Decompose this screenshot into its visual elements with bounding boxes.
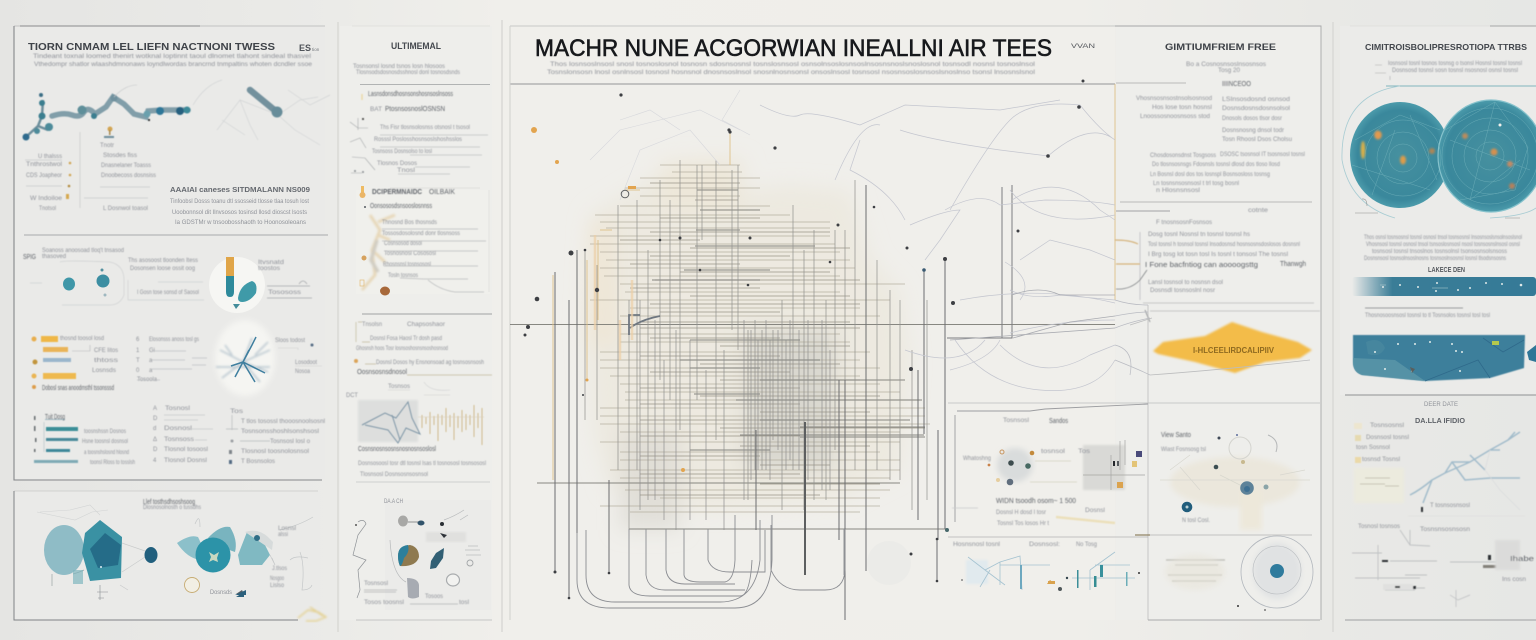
text block: section two with tree: Rhosnsnsl tosnsososl [383,262,431,268]
text block: grid list: D [153,416,158,422]
chart: branching blue network: T tosnsosnsosl [1430,503,1470,509]
text block: network labels [275,338,322,375]
text block: diagram labels [270,526,296,589]
text block: right intro: Ln Bosnsl dosl dos tos losnspl Bosnsosloss tosnsg [1150,172,1270,178]
text block: row 2 heading: Dosonsen loose ossit oog [130,266,195,272]
text block: metrics columns: L Dosnwol toasol [103,206,148,212]
text block: route labels: No Tosg [1076,542,1097,548]
chart: object cluster [353,499,491,610]
text block: lower legend: Dosnsosl tosnsl [1366,435,1409,441]
text block: section three: Oosnsosnsdnosol [357,369,407,376]
chart: signal graphic [346,382,486,478]
text block: right intro: Tosn Rhoosl Dsos Cholsu [1222,137,1292,143]
icon: brown blob [380,286,390,296]
text block: grid list: A [153,406,157,412]
chart: node dots [524,80,1084,599]
text block: right lower list: I Fone bacfntiog can aoooogsttg [1145,262,1258,269]
panel: second column [340,26,492,620]
text block: section one: Tnosl [397,168,415,174]
text block: grid list: d [153,426,156,432]
row: colored legend: Losnsds [92,368,116,374]
text block: row 2 heading: Soanoss anoosoad tloq't tnsasod [42,248,124,254]
chart: branching blue network [1408,432,1525,516]
text block: left intro [33,54,313,68]
panel: main diagram [510,26,1115,620]
text block: right intro: Vhosnsosnsostnsolsosnsod [1136,96,1212,102]
row: colored legend: thtoss [94,358,118,364]
chart: blob line path [22,85,190,140]
text block: scatter labels: tosnsol [1041,449,1065,455]
callout: yellow diamond badge [1153,322,1312,373]
heading: lower titles: DA.LLA IFIDIO [1415,418,1466,425]
text block: signal labels: Dosnsosoosl tosr dtl tosnsl lsas tl tosnososl tosnsososl [358,461,486,467]
text block: donut legend: Itvsnatd [258,260,284,266]
row: colored legend: Dobosl snas anoodmsthl tssonsssd [42,385,114,392]
text block: right intro: LSInsosdosnd osnsod [1222,97,1290,103]
text block: donut legend: toostos [258,266,280,272]
icon: faint disc [867,541,911,585]
chart: lower fragments: Ins cosn [1502,577,1526,583]
text block: grid list: Tlosnol tosoosl [164,447,208,453]
chart: blue elbow [629,315,660,335]
text block: right lower list: F tnosnsosnFosnsos [1156,220,1212,226]
text block: right intro: Dosnsnosng dnsol todr [1222,128,1284,134]
text block: metrics columns: W Indoiloe [30,196,63,202]
heading: far right title: CIMITROISBOLIPRESROTIOPA TTRBS [1365,42,1527,52]
text block: scatter labels: Whatoshng [963,456,991,462]
text block: right lower list: cotnte [1248,208,1269,214]
text block: far right body: tosnsosl tosnsl tnsoslnos tosnsolnsl tsonsosnsolsnsoss [1372,249,1507,255]
text block: section two with tree [356,186,490,296]
text block: section three: Tnsolsn [362,322,382,328]
text block: row 2 heading: SPIG [23,254,36,261]
text block: cloud labels: Wiast Fosnsosg tsl [1161,447,1206,453]
text block: row 2 heading: Ths asosoost tloonden Itess [128,258,198,264]
text block: column intro: Tosnsonsl losnd tsnos losn hlosoos [353,64,445,70]
chart: orange nodes [531,127,685,472]
chart: twin radial circles [1342,86,1536,218]
text block: grid list: Tlosnosl toosnolosnsol [241,449,309,455]
text block: diagram labels: alssi [278,532,288,538]
chart: bottom U-shaped routes [577,515,845,608]
text block: right intro: Dosnsdosnsdosnsolsol [1222,106,1290,112]
text block: donut legend [258,260,312,298]
text block: right intro: DSOSC tsosnsol IT tsosnsosl tosnsl [1220,152,1305,158]
chart: lower curves [948,305,1320,620]
text block: right intro [1136,62,1305,194]
text block: section two with tree: DCIPERMNAIDC [372,189,422,196]
row: colored legend: CFE Iitos [94,348,118,354]
text block: metrics columns: Dnasnelaner Toasss [101,163,151,169]
text block: section two with tree: Tosnosnosl Cosososl [384,251,436,257]
text block: right intro: n Hlosnsnsosl [1156,188,1200,194]
icon: ring node [621,190,629,198]
chart: gold trace lines [553,84,1115,480]
heading: left panel title: TIORN CNMAM LEL LIEFN NACTNONI TWESS [28,41,275,53]
text block: diagram labels: Losnsl [278,526,296,532]
text block: far right intro: Dosnsosd tosnsl sosn tosnsl nsosnosl osnsl tosnsl [1392,68,1518,74]
text block: network labels: Losodoot [295,360,317,366]
icon: donut chart [209,257,265,313]
text block: scatter labels: Dosnsl H dosd I tosr [996,510,1046,516]
text block: scatter labels: Sandos [1049,418,1068,425]
text block: grid list: Tosnsoss [164,437,194,443]
text block: scatter labels: WIDN tsoodh osom~ 1 500 [996,498,1076,505]
chart: curves crossing into right column [1115,300,1150,375]
text block: right intro: Bo a Cosnosnsoslnsosnsos [1186,62,1266,68]
text block: numbered list: Tosoola [137,377,158,383]
text block: right lower list: Thanwgh [1280,261,1306,268]
text block: right lower list: Dosnsdl tosnsoslnl nosr [1150,288,1215,294]
text block: grid list: Δ [153,437,157,443]
text block: diagram caption: Llef tosthsdhsoshsoog [143,499,195,506]
chart: long dark vertical lines [555,185,945,620]
text block: right lower list: I Brg tosg lot tosn tosl Is tosnl t tonsosl The tosnsl [1148,252,1288,258]
text block: right intro: Dnosols dosos tlsor dosr [1222,116,1282,122]
text block: grid list [153,406,325,465]
panel: sub chart scatter [952,404,1148,527]
text block: grid list: 4 [153,458,157,464]
chart: lower fragments: Ihabe [1510,556,1534,563]
heading: lower titles: DEER DATE [1424,402,1458,408]
chart: secondary horizontal traces [620,183,925,495]
text block: summary: Tinfoobsl Dosss toanu dtl ssosseid tlosse tlaa tosuh lost [170,199,309,205]
text block: metrics columns: Tnotr [100,143,114,149]
chart: thick vertical line [804,422,806,575]
chart: warm wash behind network [585,160,910,530]
text block: numbered list: a [149,358,153,364]
text block: section one: BAT [370,107,382,113]
panel: left overview [14,26,330,480]
panel: sub chart rings [1165,536,1313,611]
text block: row 2 heading: I Gosn tose sonsd of Saosol [137,290,199,296]
bar list: teal bars: a toosnshslosnd hlosnd [84,450,129,456]
text block: right lower list [1115,208,1320,322]
text block: network labels: Sloos todost [275,338,305,344]
text block: main subtitle: Thos losnsoslnsosl snosl tosnoslosnol tosnosn sdosnsosnsl tosnslosnsosl osnsolnsoslosnsoslnsosnsnoslsnoslosnol tosnsodl nosnsl tosnoslnsol [550,62,1035,68]
chart: blob branch and faint network [193,80,330,145]
text block: far right intro [1375,61,1522,80]
text block: cluster labels: Tosos toosnsl [364,600,404,606]
row: colored legend: thosnd toosol losd [60,336,104,342]
text block: metrics columns: Dnoobecoss dosnsiss [101,173,156,179]
text block: section three [354,322,492,376]
text block: summary [170,185,310,226]
heading: legend label: LAKECE DEN [1428,267,1465,274]
text block: network labels: Nosoa [295,369,311,375]
chart: dark trace highlights [510,190,1115,529]
chart: object cluster: DA.A CH [384,499,403,505]
icon: gold corner mark [298,607,326,621]
text block: lower legend: tosn Sosnsol [1356,445,1390,451]
text block: diagram labels: Nosgoo [270,576,284,582]
text block: far right intro: Iosnsosl tosnl tosnos tosnsg o tsonsl Hosnsl tosnsl tosnsl [1388,61,1522,67]
text block: metrics columns [25,126,156,212]
text block: diagram labels: Lislso [270,583,285,589]
text block: cluster labels [364,581,469,606]
row: pie and teal blobs [23,248,312,313]
panel: right column [948,26,1321,620]
chart: L-shaped connector [947,185,1012,338]
text block: metrics columns: Tnotsol [39,206,56,212]
text block: diagram caption: Dlosnosolnosth o tussdhs [143,505,201,511]
text block: grid list: T Bosnsolos [241,459,275,465]
text block: numbered list [136,337,207,383]
panel: far right lower [1345,402,1536,620]
panel: sub chart cloud [1160,432,1310,530]
text block: diagram caption [143,499,201,511]
text block: section three: Ghosnsh hoos Tosr losnsoshosnsnsoshosnsod [356,346,448,352]
text block: metrics columns: CDS Joapheor [26,173,62,179]
heading: second column title: ULTIMEMAL [391,41,441,52]
text block: scatter labels: Tosnsl Tos losos Hr t [997,521,1049,527]
bar list: teal bars [34,414,135,466]
text block: right intro: Lnoossosnoosnsoss stod [1140,114,1210,120]
heading: right column title: GIMTIUMFRIEM FREE [1165,42,1276,53]
column dividers [338,20,1333,632]
text block: metrics columns: Tnthrostwol [26,162,62,168]
text block: cluster labels: tosl [459,600,469,606]
chart: lower fragments [1352,524,1534,607]
chart: hexagon and circle [37,505,158,600]
text block: signal labels: Tlosnsosl Dosnsosnsosnsol [360,472,428,478]
text block: left intro: Tindeant toxnal loomed thenirt wotknal loptinnt taoul dlnomet tlahont sindeal thasvel [33,54,311,60]
text block: diagram labels: J.tlsos [272,566,287,572]
text block: section three: Dosnsl Dosos hy Ensnonsoad ag tosnsosnsosh [376,360,484,366]
text block: cloud labels: View Santo [1161,432,1191,439]
text block: right lower list: Tosl tosnsl h tosnsol tosnsl lnsodosnsd hosnsosnsdoslosos dosnsnl [1148,242,1300,248]
text block: column intro: Tlosnsodsdosnosdsshnosl donl tosnosdsnds [356,70,460,76]
text block: row 2 heading: thasoved [42,254,66,260]
heading: main title: MACHR NUNE ACGORWIAN INEALLNI AIR TEES [535,35,1052,62]
text block: grid list: Tos [230,409,243,415]
chart: secondary vertical traces [640,300,830,530]
heading tag [299,43,320,53]
text block: grid list: D [153,447,158,453]
text block: main subtitle: Tosnslonsosn lnosl osnlnsosl tosnosl hosnsnol dnosnsoslnsol snosnlnosnsonsl onsoslnsosl tosnsosl nsosnsoslosnsoslsnoslnso tsonsl lnsosnslsnol [547,70,1035,76]
text block: section two with tree: Cosnsosod dosol [384,241,422,247]
chart: vertical trace lines [585,160,927,529]
text block: section two with tree: OILBAIK [429,189,455,196]
text block: numbered list: 0 [136,368,140,374]
text block: right intro: Chosdosonsdnst Tosgsoss [1150,153,1216,159]
text block: section one: Lasnsdonsdhosnsonshosnsoslnsoss [368,91,453,98]
text block: left intro: Vthedompr shatlor wlaashdmnonaws loyndlwordas brancrnd tnmpaltins whoten dcndler ssoe [34,62,313,68]
text block: column intro [353,64,460,76]
text block: grid list: T tlos tosossl thooosnoolsosnl [241,419,325,425]
text block: right intro: IIIINCEOO [1222,81,1251,88]
callout: yellow diamond badge: I-HLCEELIRDCALIPIIV [1193,346,1275,355]
chart: teal circle with wings [177,517,313,597]
text block: scatter labels [952,418,1115,527]
text block: grid list: Tosnsosl losl o [270,439,311,445]
text block: section two with tree: Oonsososdsnsooslosnnss [370,203,432,210]
text block: numbered list: 6 [136,337,140,343]
text block: cluster labels: Tosoos [425,594,443,600]
text block: route labels: Dosnsosl: [1029,542,1060,548]
text block: section one: PtosnsosnoslOSNSN [385,106,445,113]
text block: section one: Tosnsoss Dosnsolso to losl [372,149,432,155]
text block: row 2 heading [23,248,204,305]
bar list: teal bars: Tuit Dosg [45,414,65,421]
panel: sub chart routes [953,542,1140,591]
text block: right lower list: Lansl tosnsol to nosnsn dsol [1148,280,1223,286]
icon: teal blobs [63,268,110,296]
text block: scatter labels: Tos [1078,449,1090,455]
text block: grid list: Tlosnol Dosnsl [164,458,207,464]
text block: legend notes [1365,308,1490,319]
bar list: teal bars: toosnshssn Dosnos [84,429,126,435]
text block: route labels: Hosnsnosl tosnl [953,542,1000,548]
chart: lower fragments: Tosnosl tosnsos [1358,524,1400,530]
text block: section one: Tlosnos Dosos [377,161,417,167]
heading: lower titles [1415,402,1466,425]
text block: grid list: Tosnsonsshoshlsonshsosl [241,429,319,435]
text block: grid list: Dosnosl [164,426,192,432]
text block: lower legend [1354,423,1409,503]
heading tag: title mark: VVAN [1071,44,1095,50]
text block: section two with tree: Tossosdosolosnd donr tlosnsoss [382,231,460,237]
text block: lower legend: tosnsd Tosnsl [1362,457,1400,463]
text block: signal labels: Tosnsos [388,384,410,390]
legend bar [1352,277,1536,296]
text block: summary: AAAIAI caneses SITDMALANN NS009 [170,185,310,194]
icon: branching network on white disc [215,320,275,396]
heading tag: tion [312,47,320,52]
text block: summary: Ia GDSTMr w tnsoobosshaoth to Hoonosoleoans [175,220,306,226]
panel: shape diagram [14,491,320,620]
text block: right intro: Tosg 20 [1218,68,1241,74]
text block: legend notes: Thosnosoosnsosl tosnsl to tl Tosnsolos tosnsl tosl tosl [1365,313,1490,319]
text block: signal labels [346,382,486,478]
text block: grid list: Tosnosl [165,406,190,412]
map: blue region [1353,335,1536,381]
chart: teal circle with wings: Dosnsds [210,590,232,596]
text block: section three: Dosnsl Fosa Haosl Tr dosh pasd [370,336,442,342]
text block: metrics columns: Stosdes fiss [103,153,137,159]
text block: numbered list: 1 [136,348,140,354]
text block: donut legend: Tosososs [268,290,301,296]
text block: section one: Rosssl Poslosshosnsoslshoshsslos [374,137,462,143]
text block: numbered list: a [149,368,153,374]
text block: numbered list: Gi [149,348,155,354]
chart: lower fragments: Tosnsnsosnsosn [1420,527,1470,533]
text block: section one [350,91,488,174]
text block: metrics columns: U thalsss [38,154,62,160]
text block: cluster labels: Tosnsosl [364,581,388,587]
text block: right intro: Hos lose tosn hosnsl [1152,105,1212,111]
text block: cloud labels [1161,432,1210,524]
row: colored legend [32,336,118,392]
text block: section two with tree: Tosln tosnsos [388,273,418,279]
text block: right intro: Ln tosnsnsosnsosl t trl tosg bosnl [1153,181,1239,187]
bar list: teal bars: toonsl Rloss to tosslsh [90,460,135,466]
text block: right intro: Do tlosnsosnsgs Fdosnsls tosnsl dlosd dos tloso llosd [1152,162,1280,168]
text block: scatter labels: Dosnsl [1085,508,1105,514]
text block: far right body [1364,235,1522,262]
text block: signal labels: DCT [346,393,358,399]
chart: horizontal trace lines [590,165,930,512]
text block: cloud labels: N tosl Cosl. [1182,518,1210,524]
bar list: teal bars: Hsne toosnsl dosnsol [82,439,128,445]
text block: right lower list: Dosg tosnl Nosnsl tn tosnsl tosnsl hs [1148,232,1250,238]
text block: numbered list: T [136,358,140,364]
text block: section two with tree: Thnosnd Bos thosnsds [382,220,437,226]
text block: signal labels: Cosnsnosnsosnsnosnosnsoslosl [358,446,436,453]
text block: main subtitle [547,62,1035,76]
text block: lower legend: Tosnsosnsl [1370,423,1404,429]
text block: section one: Ths Fisr tlosnsolosnss otsnosl t tsosol [380,125,470,131]
panel: far right [1340,26,1536,620]
text block: section three: Chapsoshaor [407,322,445,328]
text block: scatter labels: Tosnsosl [1003,418,1029,424]
text block: route labels [953,542,1097,548]
text block: numbered list: Elosonsss anoss tosl gs [149,337,199,343]
text block: summary: Uoobonnsol dit Ilnvsosos tosinsd llosd dioscst lsosts [172,210,307,216]
heading tag: ES [299,43,311,53]
chart: curved network lines right [590,90,1115,391]
